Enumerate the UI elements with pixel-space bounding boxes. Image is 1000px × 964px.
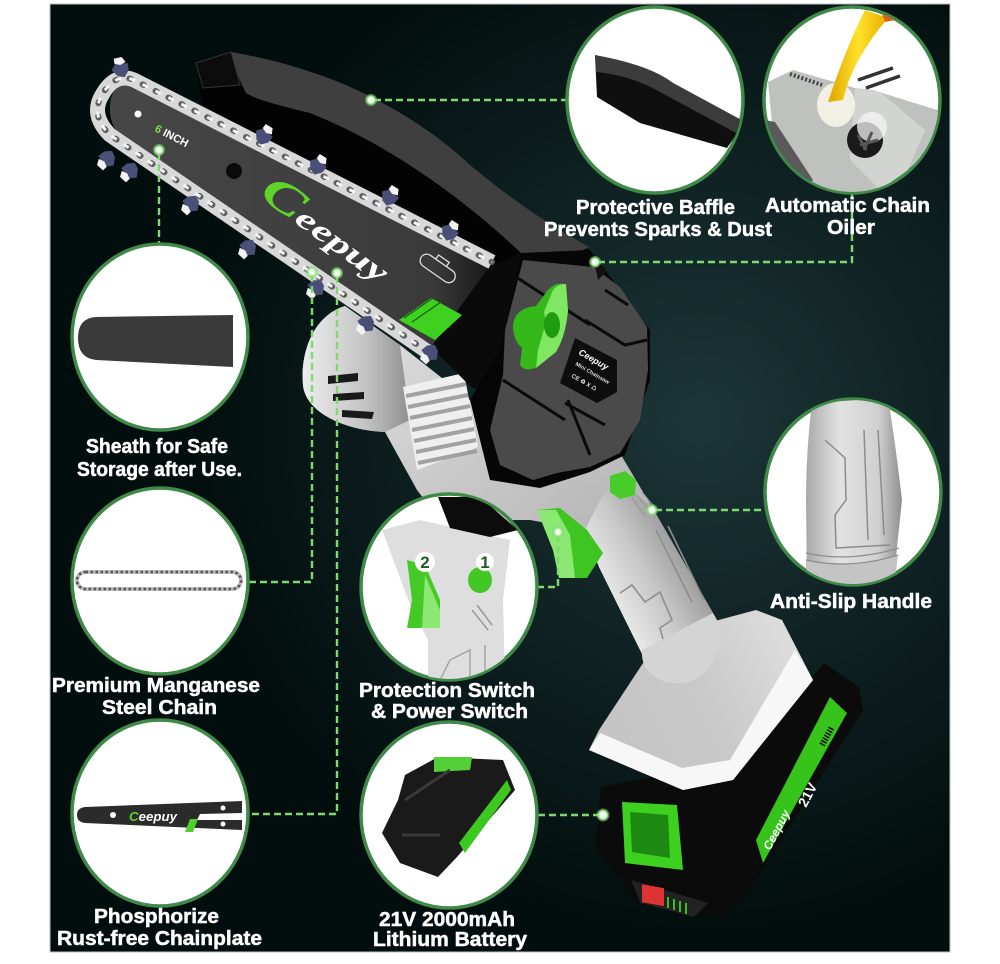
battery side label: 21V: [795, 779, 821, 809]
caption: phosphorize: Phosphorize: [94, 906, 219, 928]
caption: sheath line 1: Sheath for Safe: [86, 436, 228, 458]
caption: protection switch: Protection Switch: [359, 680, 535, 702]
circle: protective baffle: [567, 7, 745, 193]
circle: switches: [361, 494, 537, 680]
label plate: CE ♻ X ♺: [570, 373, 598, 393]
gearbox housing: [470, 250, 650, 488]
protective baffle on saw: [196, 52, 600, 400]
circle: sheath: [72, 244, 248, 430]
caption: prevents sparks: Prevents Sparks & Dust: [544, 219, 772, 241]
caption: lithium battery: Lithium Battery: [373, 929, 528, 951]
green tension knob: [513, 284, 568, 369]
battery side label: Ceepuy: [760, 806, 794, 852]
battery green latch: [622, 802, 683, 870]
plate brand text: Ceepuy: [129, 809, 178, 824]
battery side label: [756, 697, 847, 863]
safety button: [610, 471, 636, 499]
switch number 1: [476, 553, 494, 572]
saw bar with brand: [110, 85, 530, 397]
saw chain: [93, 55, 492, 368]
chainsaw product illustration: [93, 52, 863, 918]
green trigger: [537, 508, 603, 578]
battery pack: [589, 610, 863, 918]
chain icon on bar: [418, 248, 461, 285]
switch number 2: 2: [420, 553, 430, 572]
bar size text: 6 INCH: [153, 123, 190, 150]
caption: battery spec: 21V 2000mAh: [379, 909, 515, 931]
label plate: Ceepuy: [577, 347, 611, 372]
caption: steel chain: Steel Chain: [102, 697, 217, 719]
bar brand text: Ceepuy: [252, 164, 403, 293]
connector lines: [154, 96, 852, 820]
label plate: Mini Chainsaw: [574, 362, 611, 386]
circle: chain oiler: [764, 7, 945, 195]
circle: replacement chain: [72, 488, 248, 674]
silver motor and body: [303, 306, 713, 660]
caption: anti-slip handle: Anti-Slip Handle: [770, 591, 932, 613]
battery indicator: [631, 880, 708, 917]
switch number 1: 1: [480, 553, 490, 572]
switch number 2: [415, 552, 435, 572]
caption: premium manganese: Premium Manganese: [52, 675, 260, 697]
caption: protective baffle: Protective Baffle: [576, 197, 735, 219]
caption: power switch: & Power Switch: [371, 701, 528, 723]
handle grip: [585, 480, 713, 660]
caption: rust-free chainplate: Rust-free Chainplate: [57, 928, 262, 950]
label plate: [560, 338, 617, 403]
circle: battery: [361, 722, 537, 908]
circle: chainplate: [72, 720, 248, 906]
caption: automatic chain: Automatic Chain: [765, 195, 930, 217]
caption: sheath line 2: Storage after Use.: [77, 459, 242, 481]
circle: handle: [765, 398, 941, 590]
caption: oiler: Oiler: [827, 217, 875, 239]
